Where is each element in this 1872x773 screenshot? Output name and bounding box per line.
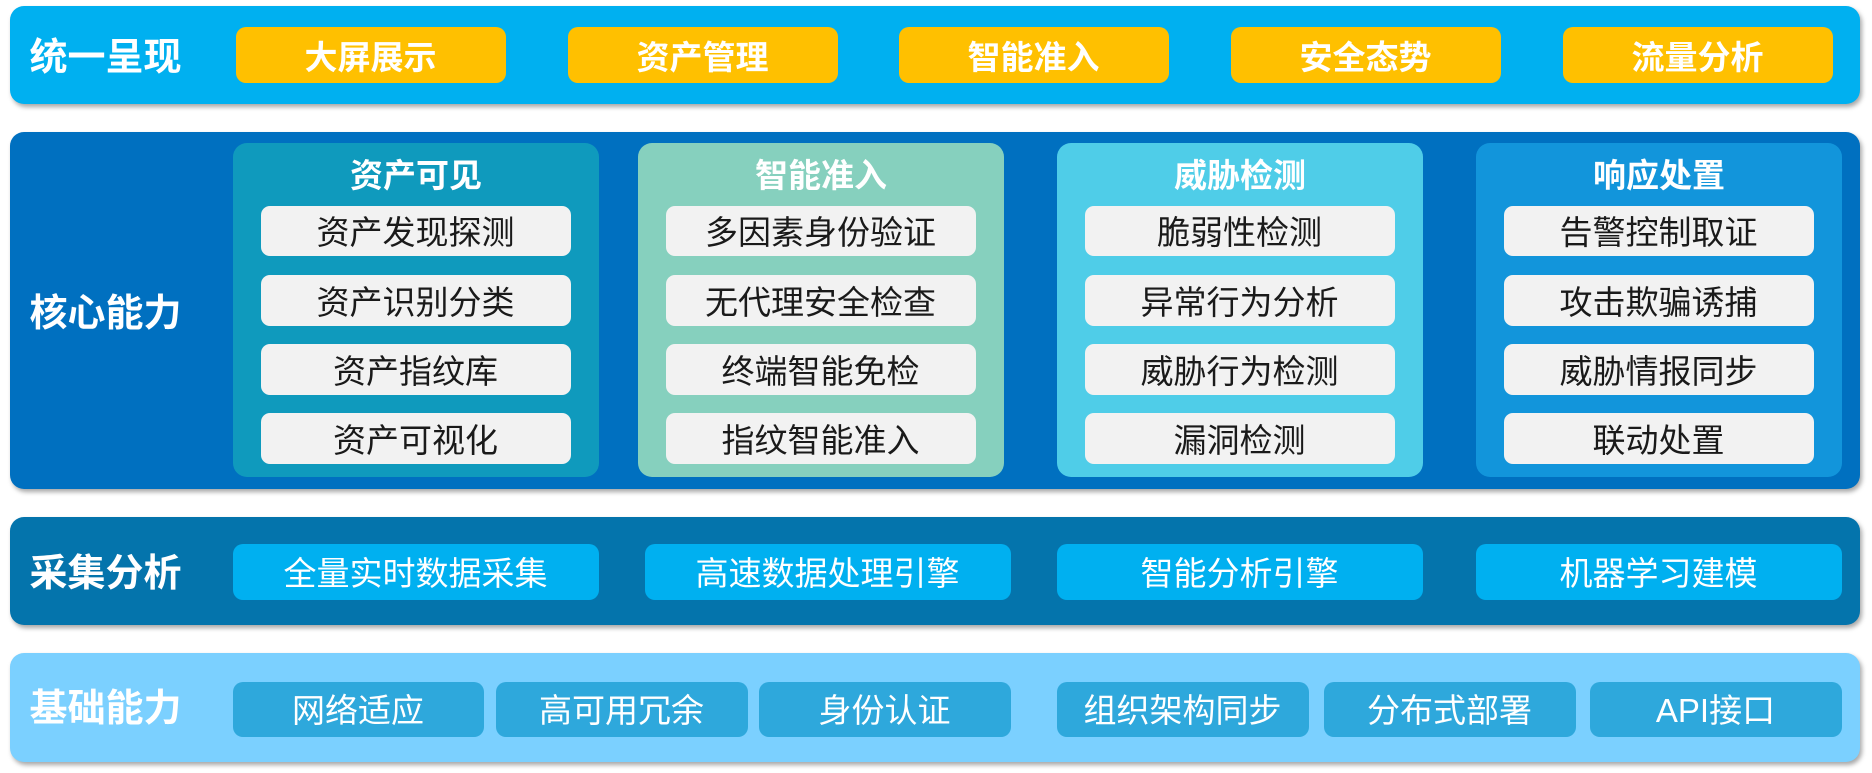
item: 资产指纹库	[261, 344, 571, 395]
item: 异常行为分析	[1085, 275, 1395, 326]
heading: 采集分析: 采集分析	[30, 553, 182, 595]
button: 智能准入: 智能准入	[968, 39, 1100, 76]
heading: 统一呈现: 统一呈现	[30, 37, 182, 79]
item: 威胁行为检测: 威胁行为检测	[1140, 352, 1338, 390]
item: 攻击欺骗诱捕	[1504, 275, 1814, 326]
band: 基础能力	[10, 653, 1860, 762]
item: 网络适应	[233, 682, 484, 737]
button: 流量分析	[1563, 27, 1833, 83]
item: 资产发现探测: 资产发现探测	[316, 214, 514, 251]
item: 资产可视化	[261, 413, 571, 464]
button: 安全态势	[1231, 27, 1501, 83]
item: 全量实时数据采集	[233, 544, 599, 600]
item: 身份认证	[759, 682, 1011, 737]
item: 多因素身份验证	[666, 206, 976, 256]
panel title: 威胁检测: 威胁检测	[1174, 157, 1306, 194]
item: 资产识别分类: 资产识别分类	[316, 284, 514, 320]
item: 资产发现探测	[261, 206, 571, 256]
item: 无代理安全检查	[666, 275, 976, 326]
item: 威胁行为检测	[1085, 344, 1395, 395]
item: 异常行为分析: 异常行为分析	[1140, 284, 1338, 320]
item: 网络适应: 网络适应	[292, 692, 424, 729]
item: 指纹智能准入: 指纹智能准入	[722, 422, 920, 458]
item: 告警控制取证: 告警控制取证	[1560, 214, 1758, 251]
item: 终端智能免检	[666, 344, 976, 395]
item: 脆弱性检测: 脆弱性检测	[1157, 214, 1322, 251]
button: 资产管理	[568, 27, 838, 83]
band: 核心能力	[10, 132, 1860, 489]
item: 无代理安全检查: 无代理安全检查	[705, 284, 936, 320]
item: 身份认证: 身份认证	[818, 692, 950, 729]
item: 智能分析引擎: 智能分析引擎	[1140, 555, 1338, 592]
item: 联动处置	[1504, 413, 1814, 464]
item: 机器学习建模	[1476, 544, 1842, 600]
item: 高速数据处理引擎	[645, 544, 1011, 600]
button: 安全态势: 安全态势	[1300, 39, 1432, 76]
item: 全量实时数据采集: 全量实时数据采集	[284, 555, 548, 592]
item: 组织架构同步: 组织架构同步	[1084, 692, 1282, 729]
panel: 资产可见	[233, 143, 599, 477]
item: 威胁情报同步	[1504, 344, 1814, 395]
item: 高可用冗余: 高可用冗余	[539, 692, 704, 729]
item: 高可用冗余	[496, 682, 748, 737]
panel title: 智能准入: 智能准入	[755, 157, 887, 194]
button: 资产管理: 资产管理	[636, 39, 768, 76]
item: 资产可视化: 资产可视化	[333, 422, 498, 458]
heading: 基础能力: 基础能力	[30, 688, 182, 730]
item: 脆弱性检测	[1085, 206, 1395, 256]
button: 智能准入	[899, 27, 1169, 83]
item: 威胁情报同步: 威胁情报同步	[1560, 352, 1758, 390]
panel title: 响应处置: 响应处置	[1593, 157, 1725, 194]
item: 多因素身份验证: 多因素身份验证	[705, 214, 936, 251]
item: 智能分析引擎	[1057, 544, 1423, 600]
item: 攻击欺骗诱捕: 攻击欺骗诱捕	[1560, 284, 1758, 320]
item: 高速数据处理引擎: 高速数据处理引擎	[696, 555, 960, 592]
panel: 响应处置	[1476, 143, 1842, 477]
item: 指纹智能准入	[666, 413, 976, 464]
band: 采集分析	[10, 517, 1860, 625]
item: 分布式部署: 分布式部署	[1367, 692, 1532, 729]
heading: 核心能力: 核心能力	[30, 293, 182, 335]
item: API接口: API接口	[1656, 692, 1775, 729]
button: 流量分析: 流量分析	[1632, 39, 1764, 76]
button: 大屏展示	[236, 27, 506, 83]
item: 资产识别分类	[261, 275, 571, 326]
item: API接口	[1590, 682, 1842, 737]
item: 漏洞检测	[1085, 413, 1395, 464]
item: 联动处置: 联动处置	[1592, 422, 1724, 458]
panel title: 资产可见: 资产可见	[350, 157, 482, 194]
panel: 智能准入	[638, 143, 1004, 477]
item: 终端智能免检: 终端智能免检	[722, 352, 920, 390]
item: 组织架构同步	[1057, 682, 1309, 737]
item: 漏洞检测: 漏洞检测	[1174, 422, 1306, 458]
panel: 威胁检测	[1057, 143, 1423, 477]
item: 机器学习建模: 机器学习建模	[1560, 555, 1758, 592]
button: 大屏展示: 大屏展示	[304, 39, 436, 76]
item: 资产指纹库: 资产指纹库	[333, 352, 498, 390]
item: 分布式部署	[1324, 682, 1576, 737]
band: 统一呈现	[10, 6, 1860, 104]
item: 告警控制取证	[1504, 206, 1814, 256]
